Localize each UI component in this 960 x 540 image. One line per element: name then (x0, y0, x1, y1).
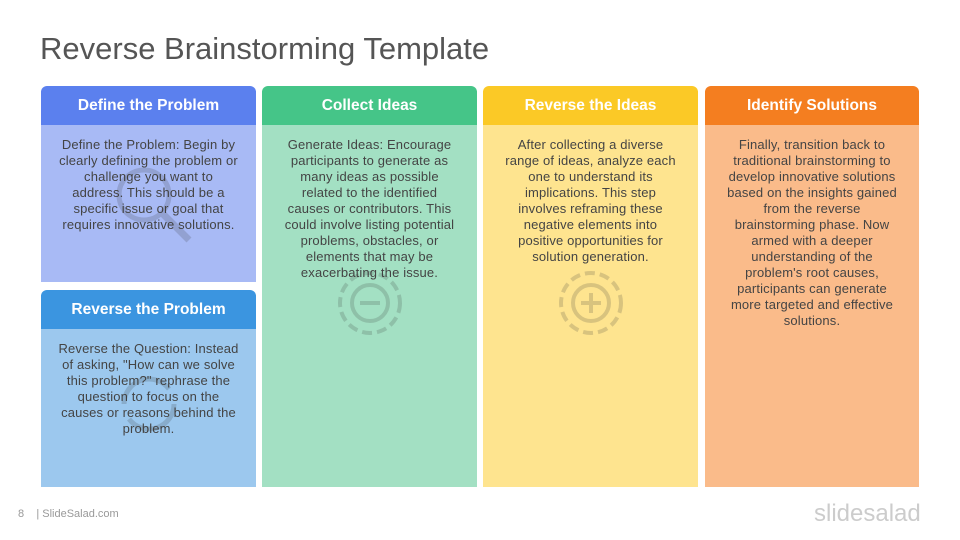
panel: define the problem (41, 86, 256, 282)
header: reverse problem: Reverse the Problem (71, 301, 226, 318)
body: identify (705, 125, 919, 487)
body: reverse ideas (483, 125, 698, 487)
panel: reverse the ideas (483, 86, 698, 487)
panel: reverse the problem (41, 290, 256, 487)
title: Reverse Brainstorming Template (40, 31, 489, 66)
body: define: Define the Problem: Begin by clearly defining the problem or challenge you want to address. This should be a specific issue or goal that requires innovative solutions. (59, 137, 238, 232)
footer page number: 8 | SlideSalad.com (18, 508, 119, 520)
footer logo: slidesalad (814, 500, 921, 527)
header: define (41, 86, 256, 125)
header: identify (705, 86, 919, 125)
panel: collect ideas (262, 86, 477, 487)
header: reverse ideas: Reverse the Ideas (525, 97, 656, 114)
body: reverse problem (41, 329, 256, 487)
header: reverse ideas (483, 86, 698, 125)
header: define: Define the Problem (78, 97, 219, 114)
panel: identify solutions (705, 86, 919, 487)
body: reverse ideas: After collecting a diverse range of ideas, analyze each one to understand its implications. This step involves reframing these negative elements into positive opportunities for solution generation. (505, 137, 676, 264)
body: collect: Generate Ideas: Encourage participants to generate as many ideas as possible related to the identified causes or contributors. This could involve listing potential problems, obstacles, or elements that may be exacerbating the issue. (285, 137, 454, 280)
body: reverse problem: Reverse the Question: Instead of asking, "How can we solve this problem?" rephrase the question to focus on the causes or reasons behind the problem. (59, 341, 238, 436)
body: collect (262, 125, 477, 487)
header: reverse problem (41, 290, 256, 329)
header: identify: Identify Solutions (747, 97, 877, 114)
body: identify: Finally, transition back to traditional brainstorming to develop innovative solutions based on the insights gained from the reverse brainstorming phase. Now armed with a deeper understanding of the problem's root causes, participants can generate more targeted and effective solutions. (727, 137, 897, 328)
body: define (41, 125, 256, 282)
header: collect: Collect Ideas (322, 97, 417, 114)
header: collect (262, 86, 477, 125)
